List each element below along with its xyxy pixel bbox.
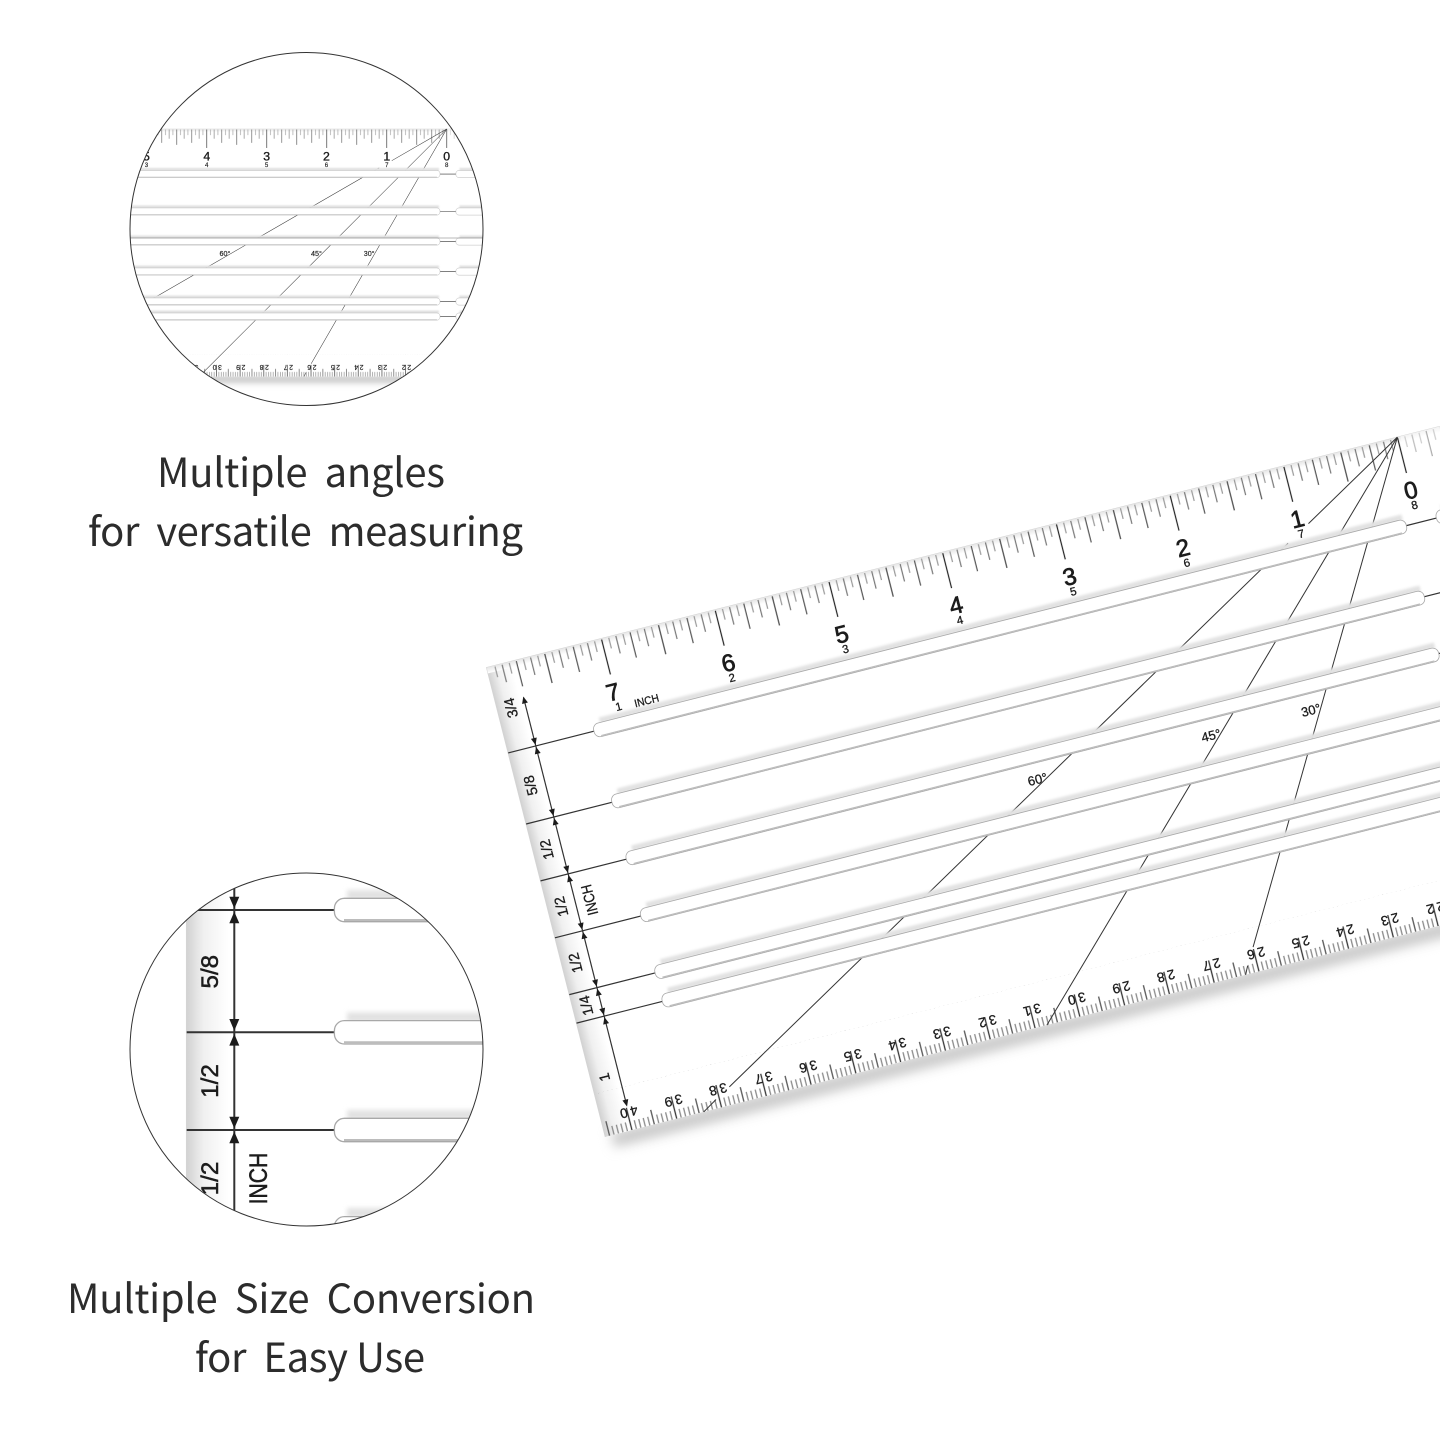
circle detail: angles — [130, 52, 484, 406]
circle centimetre numbers: 27 — [282, 363, 293, 370]
secondary small numbers: 8 — [1410, 499, 1419, 513]
caption: multiple angles: for versatile measuring — [88, 500, 523, 558]
fraction labels: 1/2 — [566, 951, 587, 974]
circle fraction labels — [200, 956, 218, 1194]
division lines — [508, 518, 1440, 1023]
circle angle labels: 30° — [364, 250, 375, 258]
main ruler illustration — [487, 384, 1440, 1148]
secondary small numbers: 3 — [841, 643, 850, 657]
centimetre numbers: 31 — [1019, 1000, 1043, 1020]
caption: size conversion: for Easy Use — [195, 1326, 425, 1384]
centimetre numbers: 29 — [1108, 978, 1132, 997]
ruler outline — [487, 397, 1440, 1137]
inch numbers: 0 — [1401, 476, 1421, 506]
centimetre numbers: 37 — [750, 1068, 774, 1088]
centimetre numbers: 36 — [795, 1057, 819, 1077]
magnified angle content — [130, 128, 482, 386]
circle inch numbers: 5 — [143, 150, 150, 164]
angle labels: 45° — [1200, 726, 1222, 745]
circle small numbers — [144, 162, 448, 168]
centimetre numbers: 23 — [1376, 910, 1400, 929]
circle small numbers: 7 — [385, 162, 389, 169]
circle fraction labels: 1/2 — [197, 1064, 224, 1098]
inch numbers: 4 — [947, 591, 966, 621]
circle detail: size conversion — [130, 873, 504, 1240]
inch numbers: 3 — [1060, 563, 1080, 592]
inch numbers: 1 — [1288, 505, 1307, 534]
inch label vertical: INCH — [578, 883, 602, 917]
strip left edge — [186, 920, 187, 1178]
caption: multiple angles: Multiple angles — [157, 441, 445, 499]
caption: size conversion: Multiple Size Conversion — [67, 1267, 535, 1325]
centimetre tick marks — [598, 823, 1440, 1136]
ruler body — [487, 397, 1440, 1137]
centimetre numbers: 30 — [1063, 989, 1087, 1009]
vertical dimension arrow line — [524, 697, 627, 1105]
circle small numbers: 8 — [445, 162, 449, 169]
inch numbers: 2 — [1173, 534, 1193, 563]
circle centimetre numbers: 28 — [258, 363, 269, 370]
circle fraction labels: 5/8 — [197, 955, 224, 989]
fraction labels: 1/2 — [537, 837, 558, 861]
circle angle labels — [220, 250, 374, 256]
secondary small numbers: 1 — [614, 701, 623, 714]
caption: size conversion — [67, 1267, 535, 1384]
fraction labels — [502, 696, 614, 1083]
inch numbers: 7 — [603, 678, 623, 708]
angle labels: 60° — [1026, 770, 1049, 789]
circle inch numbers: 1 — [383, 150, 390, 164]
circle angle labels: 45° — [311, 250, 322, 258]
white grooves — [592, 462, 1440, 1008]
centimetre numbers: 25 — [1287, 932, 1311, 952]
circle inch label: INCH — [245, 1153, 273, 1204]
angle lines — [585, 437, 1440, 1112]
inch tick marks — [490, 397, 1440, 706]
dimension arrowheads — [229, 897, 239, 1143]
circle centimetre numbers: 26 — [306, 363, 316, 370]
caption: multiple angles — [88, 441, 523, 558]
fraction labels: 1/4 — [577, 994, 597, 1017]
groove shading — [347, 890, 487, 1218]
circle centimetre numbers: 23 — [376, 363, 387, 370]
angle labels: 30° — [1300, 701, 1322, 720]
graded strip — [188, 900, 214, 1199]
inch numbers: 5 — [832, 620, 852, 650]
circle centimetre numbers: 22 — [400, 363, 411, 370]
circle angle labels: 60° — [219, 250, 230, 258]
circle inch numbers: 0 — [443, 150, 450, 164]
circle inch numbers — [144, 152, 450, 161]
vertical dimension arrow line — [233, 873, 235, 1226]
fraction labels: 1 — [597, 1071, 614, 1083]
magnified size content — [186, 888, 482, 1224]
secondary small numbers — [614, 499, 1419, 714]
groove lower edges — [601, 533, 1440, 1006]
fraction labels: 1/2 — [552, 895, 572, 918]
circle inch numbers: 4 — [203, 150, 210, 164]
fraction labels: 3/4 — [502, 696, 522, 719]
centimetre numbers: 40 — [615, 1102, 639, 1122]
fraction labels: 5/8 — [521, 773, 542, 797]
centimetre numbers: 28 — [1152, 966, 1177, 986]
circle inch numbers: 3 — [263, 150, 270, 164]
inch numbers: 6 — [719, 649, 738, 678]
division lines — [187, 910, 338, 1130]
circle centimetre numbers: 24 — [353, 363, 364, 370]
circle centimetre numbers: 31 — [188, 363, 198, 370]
secondary small numbers: 4 — [956, 614, 965, 628]
centimetre numbers: 34 — [884, 1034, 908, 1054]
dimension arrowheads — [520, 696, 630, 1107]
centimetre numbers: 24 — [1332, 921, 1356, 941]
circle outline — [130, 52, 483, 406]
circle small numbers: 5 — [265, 162, 269, 169]
circle small numbers: 3 — [145, 162, 149, 169]
circle inch numbers: 2 — [323, 150, 330, 164]
secondary small numbers: 7 — [1297, 528, 1306, 541]
centimetre numbers: 26 — [1243, 944, 1267, 963]
centimetre numbers: 33 — [929, 1023, 953, 1043]
white grooves — [334, 898, 482, 1224]
centimetre numbers: 38 — [705, 1080, 729, 1099]
secondary small numbers: 5 — [1069, 586, 1078, 599]
top edge band — [487, 397, 1440, 673]
circle small numbers: 6 — [325, 162, 329, 169]
centimetre numbers: 39 — [660, 1091, 684, 1111]
groove shading — [599, 470, 1440, 994]
circle small numbers: 4 — [205, 162, 209, 169]
centimetre numbers: 32 — [974, 1012, 998, 1031]
inch label top: INCH — [633, 692, 660, 710]
circle centimetre numbers — [195, 364, 411, 370]
circle centimetre numbers: 30 — [211, 363, 222, 370]
centimetre numbers — [615, 898, 1440, 1122]
ruler drop shadow — [611, 863, 1440, 1147]
centimetre numbers: 27 — [1198, 955, 1222, 975]
lighter ticks past zero — [1400, 397, 1440, 475]
secondary small numbers: 2 — [728, 672, 737, 685]
centimetre numbers: 35 — [839, 1046, 863, 1065]
secondary small numbers: 6 — [1182, 557, 1192, 570]
inch numbers — [603, 476, 1421, 708]
ruler artwork without text — [487, 384, 1440, 1148]
angle labels — [1026, 701, 1322, 789]
circle centimetre numbers: 29 — [235, 363, 245, 370]
groove lower edges — [344, 919, 482, 1141]
circle fraction labels: 1/2 — [197, 1162, 224, 1195]
circle outline — [130, 873, 483, 1226]
left graded strip — [487, 661, 630, 1137]
circle centimetre numbers: 25 — [329, 363, 340, 370]
thin reference line across circle — [130, 238, 482, 239]
